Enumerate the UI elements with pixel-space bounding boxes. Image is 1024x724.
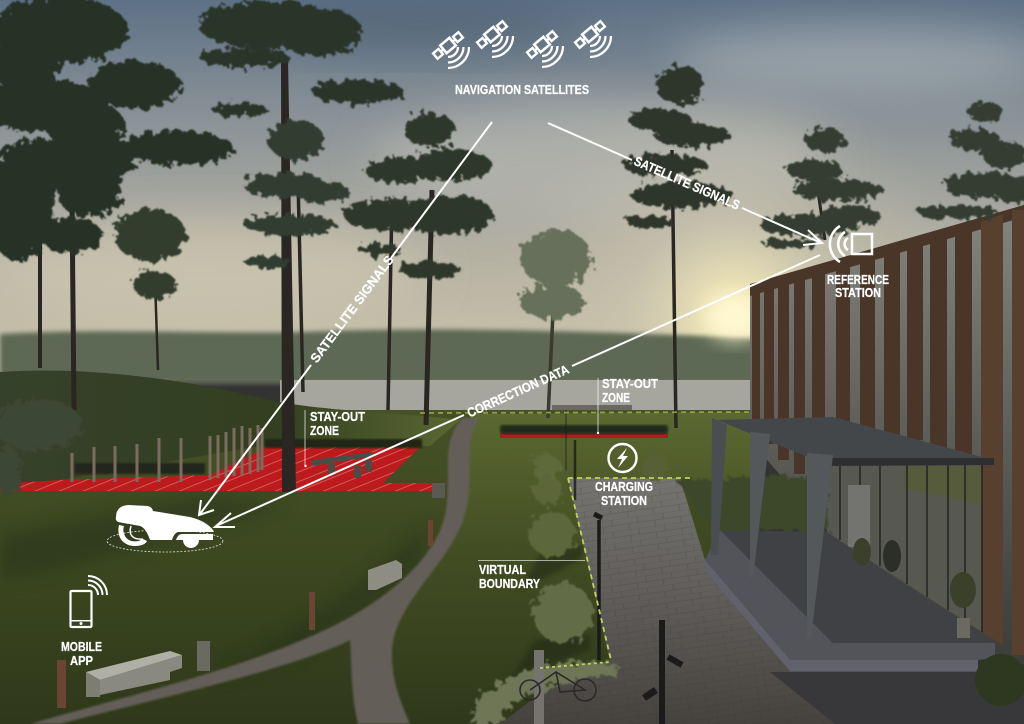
garden bed under canopy [678, 475, 827, 533]
label: mobile app [61, 639, 102, 668]
label: mobile app: APP [70, 653, 93, 668]
pine foliage right group [623, 65, 1024, 248]
arrow: correction data to mower [215, 255, 820, 527]
label: satellite signals right: SATELLITE SIGNALS [632, 153, 742, 213]
arrow: satellite signals to mower [199, 122, 492, 515]
icon: robotic mower [107, 505, 223, 552]
leader and label: stay-out zone right: ZONE [602, 390, 630, 405]
trees [0, 0, 1024, 494]
glass facade under canopy [827, 465, 982, 632]
hedges and fence [72, 425, 422, 482]
lawn shadows [0, 495, 430, 680]
icon: charging station [608, 444, 636, 472]
label: reference station: STATION [835, 285, 881, 300]
flower bed and bike [470, 650, 618, 724]
lake [280, 380, 755, 413]
main trunk [281, 60, 296, 492]
label: charging station: STATION [601, 493, 647, 508]
leader and label: stay-out zone right: STAY-OUT [602, 376, 658, 391]
foreground tree left [0, 399, 82, 494]
arrow: satellite signals to reference station [548, 123, 822, 245]
icon: mobile app [70, 576, 107, 627]
sky [0, 0, 1024, 380]
pine foliage centre group [198, 1, 494, 279]
pine trunks [40, 150, 825, 428]
left hill [0, 370, 460, 484]
bush shadows on lawn [510, 545, 590, 680]
leader and label: stay-out zone left [304, 409, 365, 467]
red stay-out zone left [0, 447, 445, 491]
paving [500, 478, 1024, 724]
gravel path [30, 418, 480, 724]
benches and posts [57, 483, 445, 708]
canopy [711, 417, 994, 638]
leader and label: stay-out zone left: STAY-OUT [310, 409, 365, 424]
far lawn right [380, 412, 752, 724]
label: reference station: REFERENCE [827, 272, 889, 287]
lamp posts [566, 410, 682, 724]
distant treeline [0, 330, 760, 384]
leader and label: virtual boundary [478, 560, 585, 591]
light pine [520, 230, 592, 320]
label: reference station [827, 272, 889, 300]
icons: navigation satellites [432, 20, 611, 68]
label: charging station: CHARGING [595, 479, 653, 494]
entrance steps [705, 530, 995, 672]
virtual boundary dashes [420, 412, 752, 668]
label: charging station [595, 479, 653, 508]
leader and label: stay-out zone left: ZONE [310, 423, 339, 438]
round hedges [529, 452, 669, 643]
label: correction data: CORRECTION DATA [465, 361, 572, 420]
picnic table [312, 452, 376, 478]
label: navigation satellites: NAVIGATION SATELLITES [455, 82, 589, 97]
building [750, 205, 1024, 665]
red stay-out zone right [500, 433, 668, 438]
leader and label: virtual boundary: BOUNDARY [479, 576, 540, 591]
label: mobile app: MOBILE [61, 639, 102, 654]
leader and label: stay-out zone right [597, 376, 658, 434]
pots and shrub [853, 538, 1024, 706]
lawn [0, 410, 760, 724]
icon: reference station [830, 226, 872, 262]
leader and label: virtual boundary: VIRTUAL [479, 562, 526, 577]
label: satellite signals left: SATELLITE SIGNALS [307, 252, 397, 366]
jetty [552, 405, 632, 412]
pine foliage left group [0, 0, 234, 299]
